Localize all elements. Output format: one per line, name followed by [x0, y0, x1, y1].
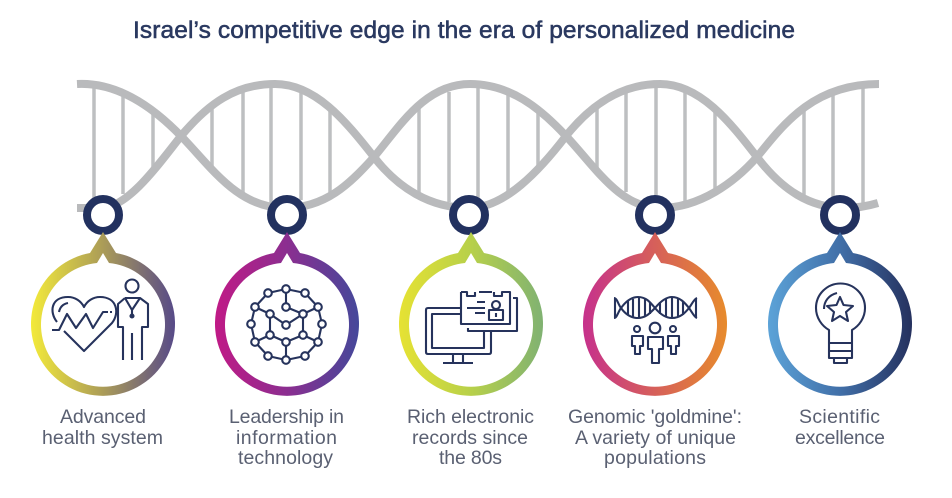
helix rungs [94, 84, 863, 206]
label: Scientific [799, 406, 880, 428]
gradient pendant ring [399, 232, 543, 396]
label: Rich electronic [407, 406, 534, 428]
label [42, 406, 163, 449]
connector ring [639, 199, 671, 231]
panel: advanced health system [31, 199, 175, 449]
label: populations [604, 447, 706, 469]
icon: heart and doctor [52, 280, 148, 360]
connector ring [824, 199, 856, 231]
panel: leadership in information technology [215, 199, 359, 469]
connector ring [453, 199, 485, 231]
icon: DNA and people [614, 297, 697, 363]
label [795, 406, 885, 449]
gradient pendant ring [215, 232, 359, 396]
gradient pendant ring [583, 232, 727, 396]
label: Advanced [60, 406, 146, 428]
label [568, 406, 742, 469]
gradient pendant ring [31, 232, 175, 396]
panel: genomic goldmine [568, 199, 742, 469]
label: technology [238, 447, 333, 469]
DNA double helix [77, 84, 879, 208]
icon: computer and secure record [426, 292, 517, 363]
label: Genomic 'goldmine': [568, 406, 742, 428]
label: health system [42, 427, 163, 449]
icon: molecule network [247, 285, 326, 364]
connector ring [271, 199, 303, 231]
label: Leadership in [229, 406, 344, 428]
gradient pendant ring [768, 232, 912, 396]
helix strands [77, 84, 879, 208]
title: Israel’s competitive edge in the era of personalized medicine [133, 17, 795, 44]
panel: scientific excellence [768, 199, 912, 449]
icon: light bulb with star [816, 284, 865, 363]
label: excellence [795, 427, 885, 449]
label [407, 406, 534, 469]
label: information [236, 427, 337, 449]
label: the 80s [439, 447, 502, 469]
connector ring [87, 199, 119, 231]
label: records since [412, 427, 528, 449]
label [229, 406, 344, 469]
label: A variety of unique [575, 427, 736, 449]
panel: rich electronic records [399, 199, 543, 469]
